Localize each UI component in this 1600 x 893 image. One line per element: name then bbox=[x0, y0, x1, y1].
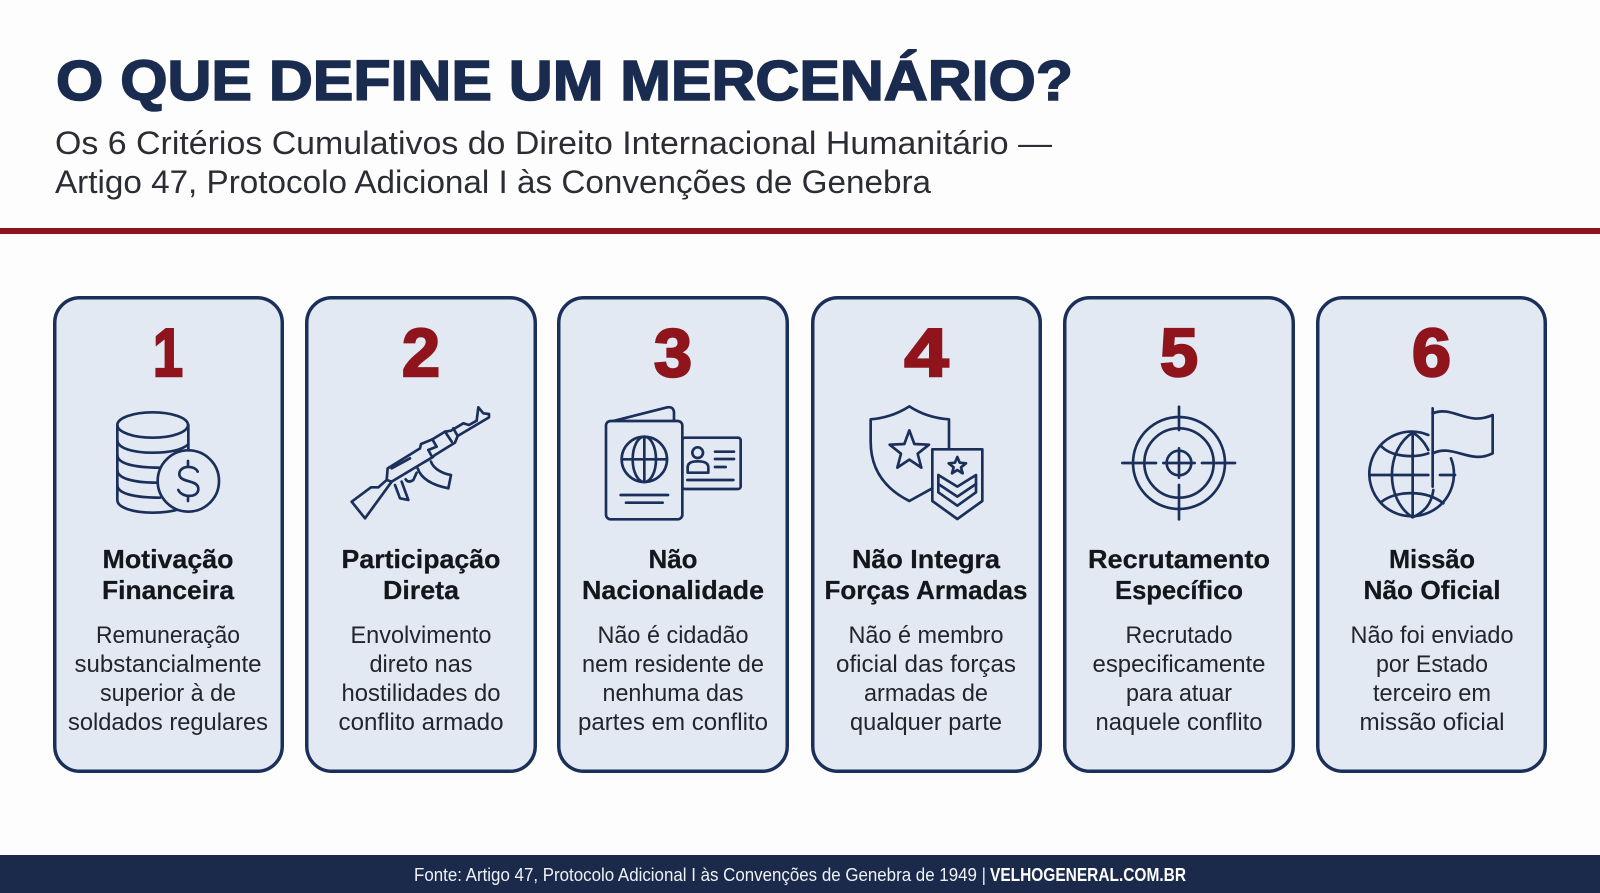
criterion 6 description bbox=[1350, 622, 1514, 736]
red divider rule bbox=[0, 228, 1600, 234]
criterion 4 description bbox=[836, 622, 1016, 736]
criterion 3 description bbox=[578, 622, 768, 736]
criterion 2 description: conflito armado bbox=[338, 709, 504, 736]
criterion 4 heading: Forças Armadas bbox=[824, 575, 1028, 605]
criterion 3 heading bbox=[582, 544, 764, 605]
number 5: 5 bbox=[1160, 315, 1198, 391]
criterion 5 description: para atuar bbox=[1126, 680, 1232, 707]
criterion 5 heading: Específico bbox=[1115, 575, 1243, 605]
criterion 3 description: Não é cidadão bbox=[598, 622, 748, 649]
panel: criterion 2 bbox=[307, 298, 535, 771]
criterion 2 description: direto nas bbox=[370, 651, 472, 678]
criterion 3 description: nem residente de bbox=[582, 651, 764, 678]
criterion 6 description: por Estado bbox=[1376, 651, 1488, 678]
panel: criterion 3 bbox=[559, 298, 787, 771]
criterion 1 heading: Motivação bbox=[102, 544, 234, 574]
criterion 1 description: superior à de bbox=[100, 680, 236, 707]
criterion 2 heading bbox=[342, 544, 500, 605]
criterion 6 heading: Missão bbox=[1389, 544, 1475, 574]
criterion 1 description: Remuneração bbox=[96, 622, 240, 649]
criterion 1 heading: Financeira bbox=[102, 575, 235, 605]
icon: globe with flag bbox=[1369, 408, 1493, 517]
criterion 4 description: Não é membro bbox=[848, 622, 1004, 649]
criterion 5 description bbox=[1092, 622, 1266, 736]
criterion 6 description: missão oficial bbox=[1360, 709, 1504, 736]
icon: assault rifle bbox=[352, 407, 489, 518]
criterion 5 description: naquele conflito bbox=[1096, 709, 1262, 736]
icon: target crosshair bbox=[1122, 407, 1235, 519]
panel: criterion 5 bbox=[1065, 298, 1293, 771]
footer bar bbox=[0, 855, 1600, 893]
number 6: 6 bbox=[1412, 315, 1451, 391]
subtitle: Artigo 47, Protocolo Adicional I às Convenções de Genebra bbox=[55, 164, 931, 200]
criterion 2 heading: Direta bbox=[383, 575, 460, 605]
criterion 5 description: especificamente bbox=[1092, 651, 1266, 678]
title: O QUE DEFINE UM MERCENÁRIO? bbox=[56, 49, 1073, 113]
number 2: 2 bbox=[402, 315, 440, 391]
criterion 3 description: partes em conflito bbox=[578, 709, 768, 736]
criterion 2 heading: Participação bbox=[342, 544, 500, 574]
criterion 4 description: oficial das forças bbox=[836, 651, 1016, 678]
criterion 1 heading bbox=[102, 544, 235, 605]
number 4: 4 bbox=[904, 315, 949, 391]
icon: shield and rank badge bbox=[871, 406, 982, 519]
criterion 1 description: soldados regulares bbox=[68, 709, 268, 736]
number 3: 3 bbox=[654, 315, 692, 391]
criterion 6 heading: Não Oficial bbox=[1364, 575, 1500, 605]
criterion 3 heading: Não bbox=[648, 544, 698, 574]
criterion 1 description bbox=[68, 622, 268, 736]
criterion 4 description: qualquer parte bbox=[850, 709, 1002, 736]
criterion 6 description: Não foi enviado bbox=[1350, 622, 1514, 649]
footer site name: VELHOGENERAL.COM.BR bbox=[990, 865, 1186, 885]
criterion 5 description: Recrutado bbox=[1126, 622, 1232, 649]
icon: passport and ID card bbox=[606, 407, 741, 519]
footer source text: Fonte: Artigo 47, Protocolo Adicional I às Convenções de Genebra de 1949 | bbox=[414, 865, 986, 885]
criterion 1 description: substancialmente bbox=[74, 651, 262, 678]
criterion 2 description: hostilidades do bbox=[342, 680, 500, 707]
panel: criterion 1 bbox=[55, 298, 282, 771]
panel: criterion 4 bbox=[813, 298, 1040, 771]
criterion 5 heading bbox=[1088, 544, 1270, 605]
criterion 3 heading: Nacionalidade bbox=[582, 575, 764, 605]
criterion 4 description: armadas de bbox=[864, 680, 988, 707]
subtitle bbox=[55, 125, 1052, 200]
icon: coin stack with dollar bbox=[117, 412, 219, 513]
criterion 4 heading bbox=[824, 544, 1028, 605]
subtitle: Os 6 Critérios Cumulativos do Direito Internacional Humanitário — bbox=[55, 125, 1052, 161]
criterion 2 description bbox=[338, 622, 504, 736]
criterion 5 heading: Recrutamento bbox=[1088, 544, 1270, 574]
criterion 6 heading bbox=[1364, 544, 1500, 605]
criterion 2 description: Envolvimento bbox=[350, 622, 492, 649]
panel: criterion 6 bbox=[1318, 298, 1545, 771]
criterion 6 description: terceiro em bbox=[1373, 680, 1491, 707]
number 1: 1 bbox=[153, 315, 183, 391]
criterion 3 description: nenhuma das bbox=[602, 680, 744, 707]
criterion 4 heading: Não Integra bbox=[852, 544, 1001, 574]
